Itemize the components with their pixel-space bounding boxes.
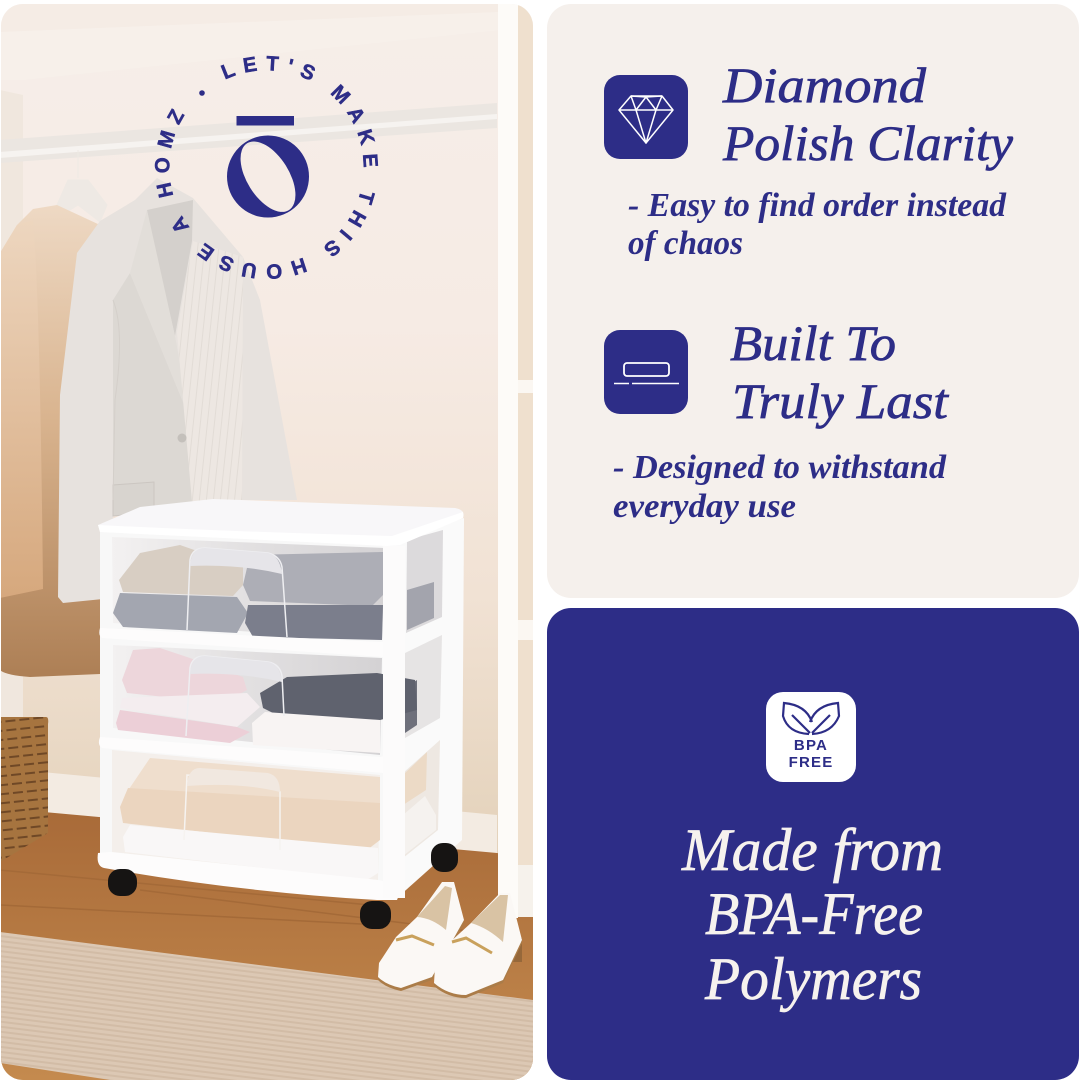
top drawer (112, 537, 385, 640)
icon: BPA free badge (766, 692, 856, 782)
shelving post (498, 0, 533, 918)
drawer handle (187, 548, 287, 637)
middle drawer (113, 645, 417, 755)
corner post (383, 546, 405, 898)
caster wheels (108, 843, 458, 929)
panel: features (547, 4, 1079, 598)
circular slogan: LET'S MAKE THIS HOUSE A HOMZ (154, 56, 378, 279)
baseboard (48, 772, 497, 853)
rug (0, 932, 533, 1080)
jacket button (178, 434, 186, 442)
hanger behind coat (78, 150, 105, 220)
panel: BPA free (547, 608, 1079, 1080)
feature text: easy to find order (628, 187, 1007, 262)
folded grey left top drawer (113, 593, 248, 633)
feature text: designed to withstand: - Designed to withstand (613, 449, 947, 486)
panel: closet photo scene (0, 0, 533, 1080)
clothes rail (0, 103, 497, 163)
callout: made from BPA-free polymers: Polymers (704, 946, 922, 1012)
folded pink lower (116, 710, 250, 743)
jacket pocket (113, 482, 154, 516)
jacket inner shirt (147, 200, 193, 336)
cart lid front lip (98, 512, 463, 546)
logo ring (227, 135, 309, 218)
folded pink blouses (122, 648, 247, 696)
jacket pleated front (180, 365, 200, 502)
folded white layer (162, 693, 260, 727)
feature text: easy to find order: - Easy to find order instead (628, 187, 1007, 224)
icon: BPA free badge: FREE (789, 754, 833, 771)
left loafer (378, 882, 464, 991)
light jacket (58, 178, 297, 603)
bottom rail of cart (98, 852, 403, 900)
white loafers (378, 882, 522, 998)
feature text: designed to withstand: everyday use (613, 488, 796, 525)
feature heading: diamond polish clarity: Polish Clarity (722, 115, 1014, 171)
feature text: designed to withstand (613, 449, 947, 525)
bottom drawer (112, 750, 380, 880)
cart lid (98, 499, 464, 546)
jacket left body (113, 273, 192, 510)
right loafer (434, 893, 522, 998)
feature heading: built to truly last: Built To (730, 315, 896, 371)
folded white blanket (123, 825, 378, 880)
folded cream blanket (120, 788, 380, 850)
brand badge (154, 56, 378, 279)
folded white right (252, 712, 380, 753)
side panel of drawer cart (385, 518, 464, 898)
drawer handle grip (187, 768, 280, 792)
icon: flat shelf (604, 330, 688, 414)
wicker basket (0, 717, 48, 862)
icon: diamond (604, 75, 688, 159)
feature heading: built to truly last (730, 315, 949, 429)
drawer handle grip (190, 656, 282, 682)
folded beige top drawer (119, 545, 243, 596)
drawer handle (184, 775, 280, 850)
jacket lapel (150, 222, 169, 308)
icon: BPA free badge: BPA (794, 737, 828, 754)
logo bar (236, 116, 294, 126)
feature text: easy to find order: of chaos (628, 225, 743, 262)
feature heading: built to truly last: Truly Last (732, 373, 949, 429)
folded cream blanket back (130, 758, 380, 803)
callout: made from BPA-free polymers: Made from (681, 817, 943, 883)
drawer cart front frame (100, 525, 388, 898)
coat sleeve (0, 220, 43, 598)
folded dark grey top drawer (245, 605, 383, 640)
drawer handle (186, 656, 284, 736)
tan coat (0, 205, 110, 677)
drawer handle grip (190, 548, 282, 574)
wood floor (0, 808, 533, 1080)
feature heading: diamond polish clarity: Diamond (722, 57, 927, 113)
top divider band (99, 628, 308, 638)
ceiling moulding (1, 90, 23, 717)
callout: made from BPA-free polymers: BPA-Free (705, 881, 923, 947)
dark patterned garment (260, 673, 417, 720)
callout: made from BPA-free polymers (681, 817, 943, 1012)
folded grey right top drawer (243, 552, 383, 606)
feature heading: diamond polish clarity (722, 57, 1014, 171)
slogan dot (199, 90, 205, 96)
middle divider band (98, 738, 100, 746)
